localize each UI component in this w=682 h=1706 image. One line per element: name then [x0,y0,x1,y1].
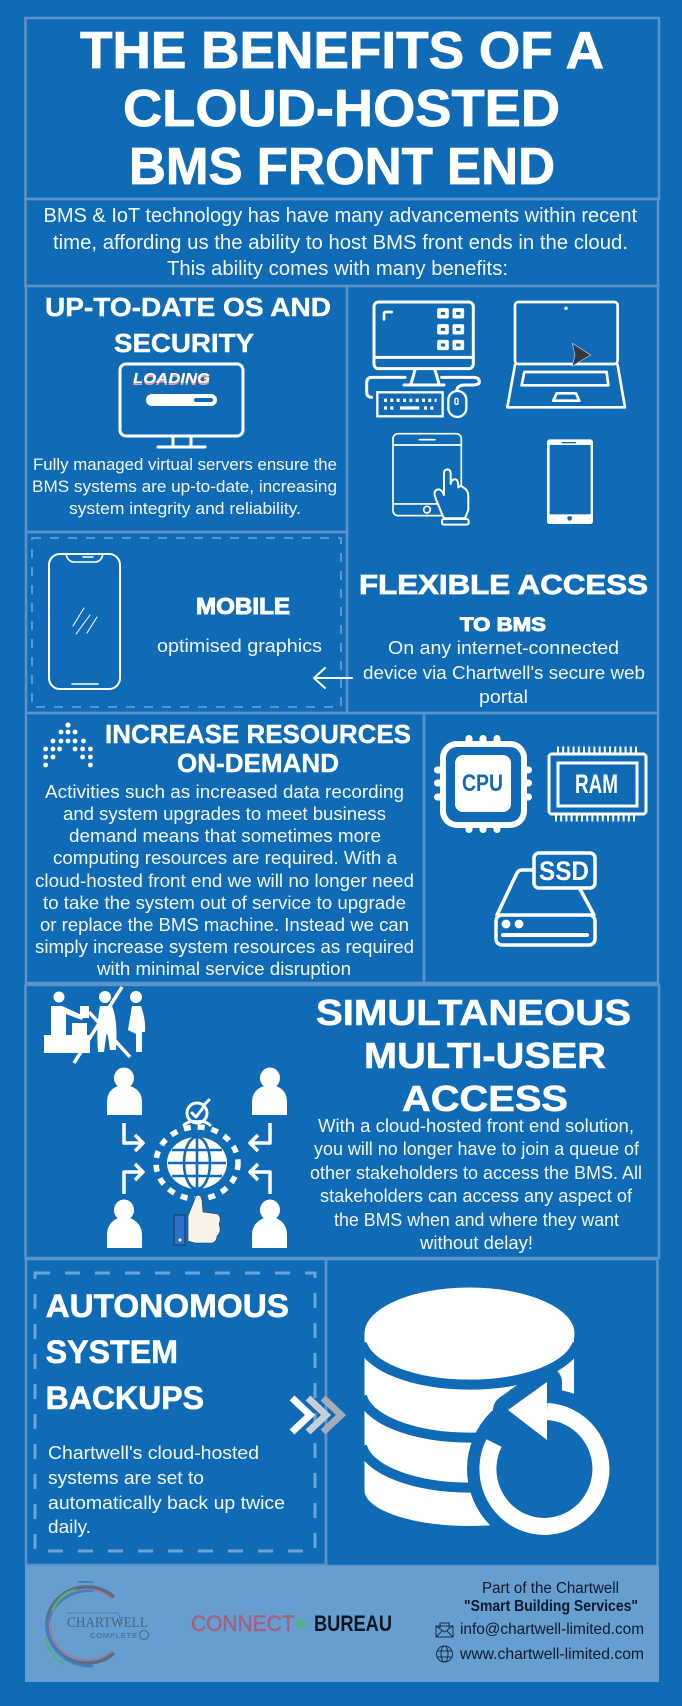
arrows: chevrons [292,1398,341,1432]
text: increase resources body [35,782,414,979]
heading: flexible access: FLEXIBLE ACCESS [359,569,648,600]
text: multi-user body: without delay! [419,1233,533,1253]
text: backups body [48,1443,285,1537]
logo: Connect+ Bureau: CONNECT [191,1611,294,1636]
icon: loading monitor: LOADING [133,372,210,389]
panel: intro [26,199,658,286]
text: increase resources body: and system upgrades to meet business [63,804,386,824]
text: multi-user body [310,1116,642,1253]
text: flexible access body: On any internet-connected [388,638,619,658]
text: part of the Chartwell [464,1580,638,1615]
icon: RAM [549,750,646,818]
logo: Connect+ Bureau: BUREAU [314,1611,392,1636]
intro text [44,205,637,280]
icon: crossed-out queue [44,987,145,1063]
intro text: BMS & IoT technology has have many advancements within recent [44,205,637,227]
logo: Chartwell Complete: CHARTWELL [67,1615,148,1631]
text: backups body: automatically back up twice [48,1493,285,1513]
icon: user top left [107,1068,142,1115]
logo: Connect+ Bureau [191,1611,392,1636]
heading: up-to-date: UP-TO-DATE OS AND [45,292,331,322]
text: multi-user body: stakeholders can access any aspect of [320,1186,633,1206]
icon: RAM: RAM [575,769,618,799]
heading: increase resources [105,719,411,778]
text: up-to-date body: Fully managed virtual servers ensure the [33,455,337,474]
logo: Chartwell Complete: COMPLETE [90,1631,137,1640]
heading: increase resources: ON-DEMAND [177,748,339,778]
text: multi-user body: other stakeholders to access the BMS. All [310,1163,642,1183]
panel: up-to-date OS and security [26,286,347,532]
icon: user bottom right [252,1200,287,1248]
text: up-to-date body: system integrity and reliability. [69,499,301,518]
text: optimised graphics: optimised graphics [157,636,322,656]
title: CLOUD-HOSTED [123,80,560,138]
icon: database with restore arrow [362,1288,627,1549]
heading: autonomous system backups: SYSTEM [46,1334,178,1370]
panel: mobile [26,532,347,713]
text: part of the Chartwell: Part of the Chartwell [482,1580,619,1597]
text: up-to-date body [32,455,337,518]
text: increase resources body: Activities such as increased data recording [45,782,404,802]
icon: thumbs up [174,1195,220,1245]
heading: autonomous system backups: AUTONOMOUS [46,1288,289,1324]
heading: simultaneous multi-user access [316,992,631,1119]
text: website: www.chartwell-limited.com [459,1646,644,1663]
text: backups body: daily. [48,1517,91,1537]
icon: user top right [252,1068,287,1115]
text: up-to-date body: BMS systems are up-to-date, increasing [32,477,337,496]
text: backups body: Chartwell's cloud-hosted [48,1443,259,1463]
text: multi-user body: With a cloud-hosted front end solution, [318,1116,634,1136]
icon: smartphone filled [547,439,593,524]
panel: autonomous backups text [26,1259,326,1565]
panel: simultaneous multi-user access [26,985,659,1258]
text: backups body: systems are set to [48,1468,204,1488]
panel: database backup icon [326,1259,658,1566]
title: BMS FRONT END [129,138,555,196]
icon: SSD [496,853,595,945]
icon: globe with check [156,1100,238,1199]
text: increase resources body: simply increase system resources as required [35,937,414,957]
icon: mail [436,1623,453,1637]
icon: CPU [434,735,532,833]
heading: simultaneous multi-user access: SIMULTANEOUS [316,992,631,1033]
text: increase resources body: demand means that sometimes more [69,826,381,846]
heading: mobile: MOBILE [196,593,290,619]
heading: simultaneous multi-user access: MULTI-USER [364,1035,606,1076]
text: email: info@chartwell-limited.com [460,1621,644,1638]
heading: simultaneous multi-user access: ACCESS [402,1078,568,1119]
logo: Chartwell Complete [45,1582,148,1666]
text: increase resources body: to take the system out of service to upgrade [43,893,406,913]
arrows: users to globe [124,1123,270,1194]
text: increase resources body: with minimal service disruption [96,959,351,979]
icon: tablet with hand [393,434,469,525]
text: increase resources body: or replace the BMS machine. Instead we can [40,915,409,935]
title: THE BENEFITS OF A [80,22,604,80]
text: increase resources body: cloud-hosted front end we will no longer need [35,871,414,891]
intro text: time, affording us the ability to host BMS front ends in the cloud. [53,232,628,254]
icon: loading monitor [120,364,243,447]
text: increase resources body: computing resources are required. With a [53,848,398,868]
panel: footer [25,1566,659,1682]
icon: desktop computer [367,302,479,417]
panel: computing resources icons [424,713,658,983]
heading: to BMS: TO BMS [460,615,546,636]
icon: web globe [436,1646,452,1662]
intro text: This ability comes with many benefits: [167,258,508,280]
icon: laptop [507,302,625,407]
icons: device group [367,302,625,525]
icon: CPU: CPU [462,770,503,797]
text: flexible access body: portal [479,687,528,707]
text: multi-user body: the BMS when and where they want [334,1210,619,1230]
text: multi-user body: you will no longer have to join a queue of [314,1139,640,1159]
text: flexible access body: device via Chartwell's secure web [363,663,645,683]
text: flexible access body [363,638,645,707]
title [80,22,604,196]
icon: loading monitor: LOADING [133,370,210,387]
text: part of the Chartwell: "Smart Building Services" [464,1598,638,1615]
heading: autonomous system backups: BACKUPS [46,1380,204,1416]
panel: flexible access [347,286,658,713]
heading: up-to-date [45,292,331,358]
heading: autonomous system backups [46,1288,289,1416]
arrow: to mobile [314,668,352,688]
icon: smartphone outline [49,554,120,689]
icon: SSD: SSD [539,856,589,886]
panel: title [26,18,659,199]
panel: increase resources [26,713,424,983]
heading: up-to-date: SECURITY [114,328,254,358]
icon: user bottom left [107,1200,142,1248]
icon: dot pattern [43,722,93,767]
heading: increase resources: INCREASE RESOURCES [105,719,411,749]
